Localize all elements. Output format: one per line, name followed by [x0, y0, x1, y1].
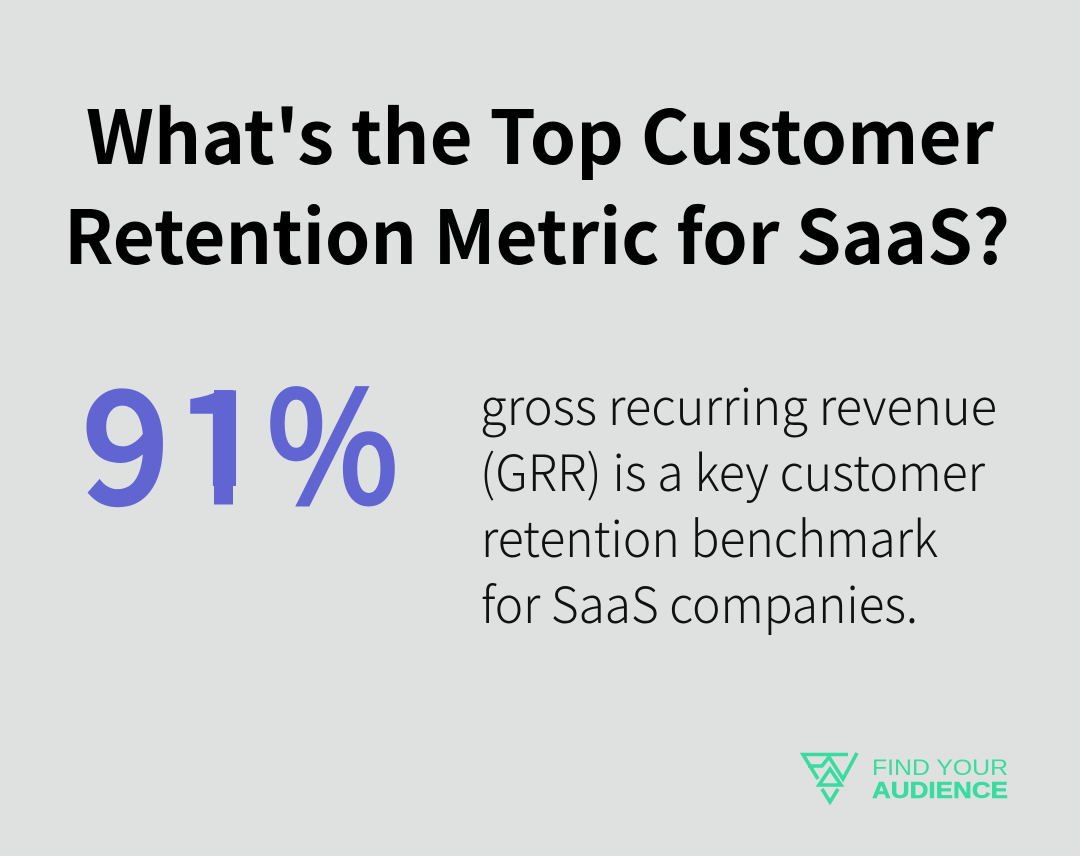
logo wordmark: FIND YOUR	[872, 755, 1008, 780]
big statistic: 91%: 1	[173, 326, 269, 546]
title: Retention Metric for SaaS?	[64, 179, 1010, 286]
title	[64, 79, 1010, 286]
logo wordmark	[872, 755, 1008, 803]
description text: for SaaS companies.	[481, 566, 918, 638]
description text: (GRR) is a key customer	[480, 434, 986, 506]
icon: triangle logo mark	[803, 753, 857, 802]
title: What's the Top Customer	[86, 79, 995, 186]
description text: retention benchmark	[481, 500, 938, 572]
logo	[803, 753, 1008, 803]
description text	[480, 368, 997, 638]
big statistic: 91%	[83, 326, 398, 546]
logo wordmark: AUDIENCE	[872, 777, 1008, 803]
big statistic: 91%: 9	[83, 326, 168, 546]
description text: gross recurring revenue	[480, 368, 997, 440]
big statistic: 91%: %	[267, 326, 398, 546]
